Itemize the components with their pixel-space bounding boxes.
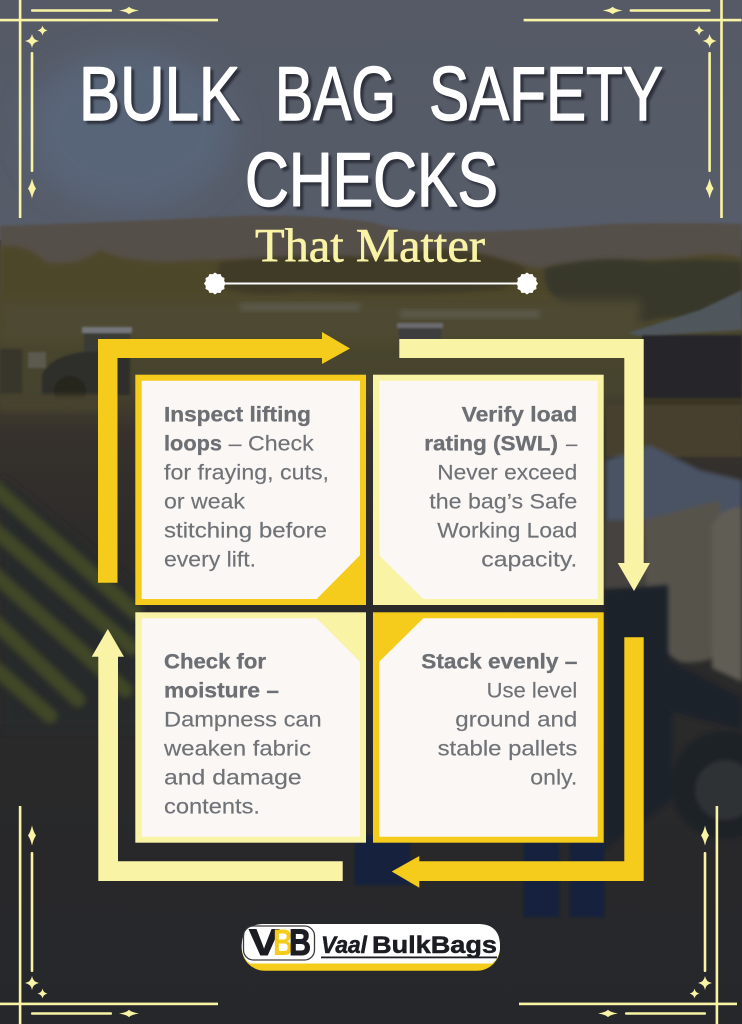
centre tractor (397, 323, 443, 342)
bulk bags on truck (604, 445, 742, 682)
truck body and wheel (604, 585, 742, 850)
logo: Vaal Bulk Bags: BulkBags (372, 932, 497, 959)
text: check for moisture: moisture – (164, 678, 279, 702)
text: verify load rating: Working Load (437, 519, 577, 543)
title divider with burst ends (204, 272, 538, 294)
arrow: bottom right leftward (392, 637, 644, 888)
text: inspect lifting loops: for fraying, cuts, (164, 461, 329, 485)
text: inspect lifting loops: every lift. (164, 548, 256, 572)
logo: Vaal Bulk Bags: V (249, 922, 279, 963)
text: check for moisture: weaken fabric (163, 736, 311, 760)
text: inspect lifting loops: – Check (229, 432, 314, 456)
corner ornament: bottom right (519, 806, 737, 1024)
text: check for moisture: Check for (164, 649, 267, 673)
text: stack evenly: stable pallets (438, 736, 577, 760)
text: inspect lifting loops: or weak (164, 490, 245, 514)
text: verify load rating: Never exceed (437, 461, 577, 485)
text: verify load rating: the bag’s Safe (429, 490, 577, 514)
title: BAG (275, 52, 396, 137)
text: stack evenly: Use level (487, 678, 577, 702)
text: inspect lifting loops (164, 403, 329, 572)
panel: inspect lifting loops (135, 375, 366, 605)
arrow: top right downward (399, 339, 650, 591)
corner ornament: top left (0, 0, 218, 218)
text: verify load rating (424, 403, 577, 572)
text: verify load rating: rating (SWL) (424, 432, 558, 456)
text: stack evenly: only. (530, 765, 577, 789)
logo: Vaal Bulk Bags: B (289, 922, 311, 963)
text: verify load rating: capacity. (481, 548, 577, 572)
text: verify load rating: – (566, 432, 577, 456)
shed (606, 290, 742, 457)
text: check for moisture: Dampness can (164, 707, 322, 731)
panel: check for moisture (135, 612, 366, 843)
logo: Vaal Bulk Bags: B (273, 922, 293, 963)
title: SAFETY (429, 52, 663, 137)
worker legs (355, 835, 604, 917)
text: inspect lifting loops: loops (164, 432, 222, 456)
panel: verify load rating (373, 375, 604, 605)
text: stack evenly (421, 649, 577, 789)
text: check for moisture (163, 649, 322, 818)
text: check for moisture: contents. (164, 794, 260, 818)
text: check for moisture: and damage (164, 765, 302, 789)
text: stack evenly: ground and (455, 707, 577, 731)
text: verify load rating: Verify load (462, 403, 577, 427)
title (79, 52, 663, 223)
subtitle: That Matter (255, 220, 485, 272)
corner ornament: top right (524, 0, 742, 218)
logo: Vaal Bulk Bags (242, 922, 500, 971)
panel: stack evenly (373, 612, 604, 843)
title: CHECKS (245, 138, 498, 223)
left tractor (0, 327, 132, 408)
text: inspect lifting loops: stitching before (164, 519, 327, 543)
title: BULK (79, 52, 240, 137)
text: inspect lifting loops: Inspect lifting (164, 403, 311, 427)
text: stack evenly: Stack evenly – (421, 649, 577, 673)
arrow: bottom left upward (92, 629, 343, 881)
logo: Vaal Bulk Bags: Vaal (321, 932, 368, 959)
crop rows (0, 478, 140, 730)
arrow: top left to right (98, 332, 350, 583)
corner ornament: bottom left (0, 806, 218, 1024)
